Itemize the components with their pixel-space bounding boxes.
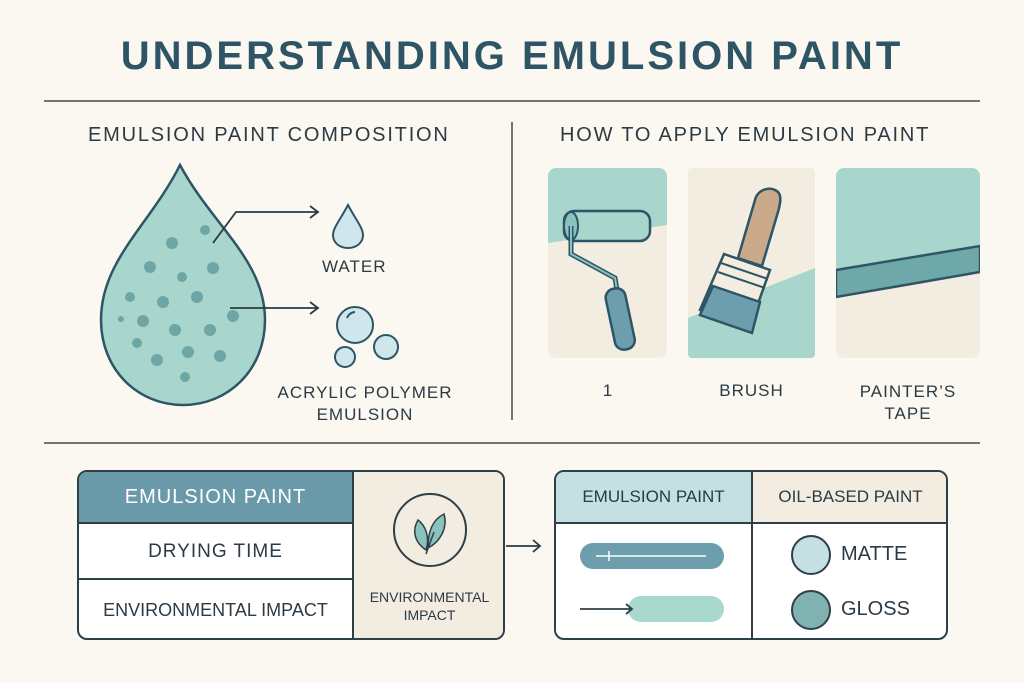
- label: environmental impact: ENVIRONMENTAL: [370, 589, 489, 605]
- icon: bubbles: [335, 307, 398, 367]
- chart: bars: [580, 543, 724, 622]
- label: environmental impact: IMPACT: [404, 607, 455, 623]
- title: UNDERSTANDING EMULSION PAINT: [121, 34, 903, 78]
- panel: brush: [688, 168, 815, 358]
- arrow: tables: [506, 540, 540, 552]
- label: environmental impact: [370, 589, 489, 623]
- panel: painter's tape: [836, 168, 980, 358]
- label: acrylic polymer: [278, 383, 452, 424]
- label: painter's tape: [860, 382, 956, 423]
- arrow: to polymer: [230, 302, 318, 314]
- header cell: [79, 472, 352, 522]
- heading: composition: EMULSION PAINT COMPOSITION: [88, 124, 450, 146]
- icon: leaf: [393, 493, 467, 567]
- label: acrylic polymer: ACRYLIC POLYMER: [278, 383, 452, 402]
- icon: large paint drop: [101, 165, 265, 405]
- panel: roller: [548, 168, 667, 358]
- table: comparison: [554, 470, 948, 640]
- header: oil-based paint: OIL-BASED PAINT: [778, 487, 923, 506]
- row: environmental impact: [79, 578, 352, 640]
- heading: application: HOW TO APPLY EMULSION PAINT: [560, 124, 930, 146]
- arrow: to water: [213, 206, 318, 243]
- label: water: WATER: [322, 257, 386, 276]
- header: emulsion paint: [556, 472, 751, 524]
- header: oil-based paint: [751, 472, 948, 524]
- row: drying time: [79, 522, 352, 580]
- row: drying time: DRYING TIME: [148, 541, 283, 562]
- cell: environmental icon: [352, 472, 505, 638]
- label: acrylic polymer: EMULSION: [317, 405, 413, 424]
- header cell: EMULSION PAINT: [125, 486, 306, 508]
- header: emulsion paint: EMULSION PAINT: [582, 487, 725, 506]
- label: painter's tape: TAPE: [884, 404, 932, 423]
- icon: water drop: [333, 205, 363, 248]
- table: emulsion paint properties: [77, 470, 505, 640]
- label: 1: 1: [603, 381, 612, 400]
- label: painter's tape: PAINTER’S: [860, 382, 956, 401]
- cell: finishes: MATTE: [841, 543, 907, 565]
- row: environmental impact: ENVIRONMENTAL IMPACT: [103, 600, 328, 620]
- cell: finishes: GLOSS: [841, 598, 910, 620]
- label: brush: BRUSH: [719, 381, 784, 400]
- cell: finishes: [751, 524, 948, 638]
